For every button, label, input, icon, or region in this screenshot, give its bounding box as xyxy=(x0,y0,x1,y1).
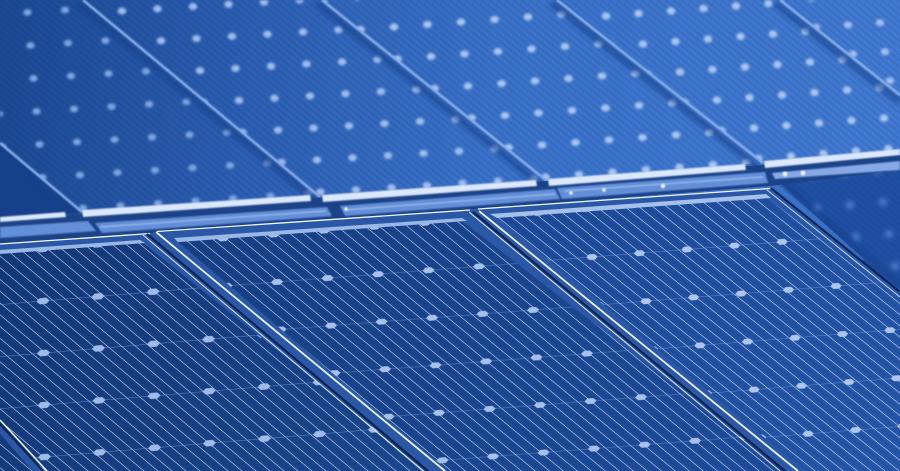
top frame lines xyxy=(0,188,771,254)
rail highlights xyxy=(0,161,900,238)
bright frame edges of upper panels xyxy=(0,149,900,222)
panel 3 cells xyxy=(497,197,900,471)
panel seams, lower row xyxy=(0,188,900,471)
panel 2 cells xyxy=(177,221,785,471)
panel 1 cells xyxy=(0,243,428,471)
cell contact dots, upper row xyxy=(0,0,900,300)
specular glints xyxy=(344,171,805,211)
gap and rail between the panel rows xyxy=(0,155,900,246)
upper row of blurred solar panels xyxy=(0,0,900,300)
panel 0 corner cells xyxy=(0,434,33,471)
lower row of sharp solar panels xyxy=(0,188,900,471)
panel seams, upper row xyxy=(0,0,900,285)
